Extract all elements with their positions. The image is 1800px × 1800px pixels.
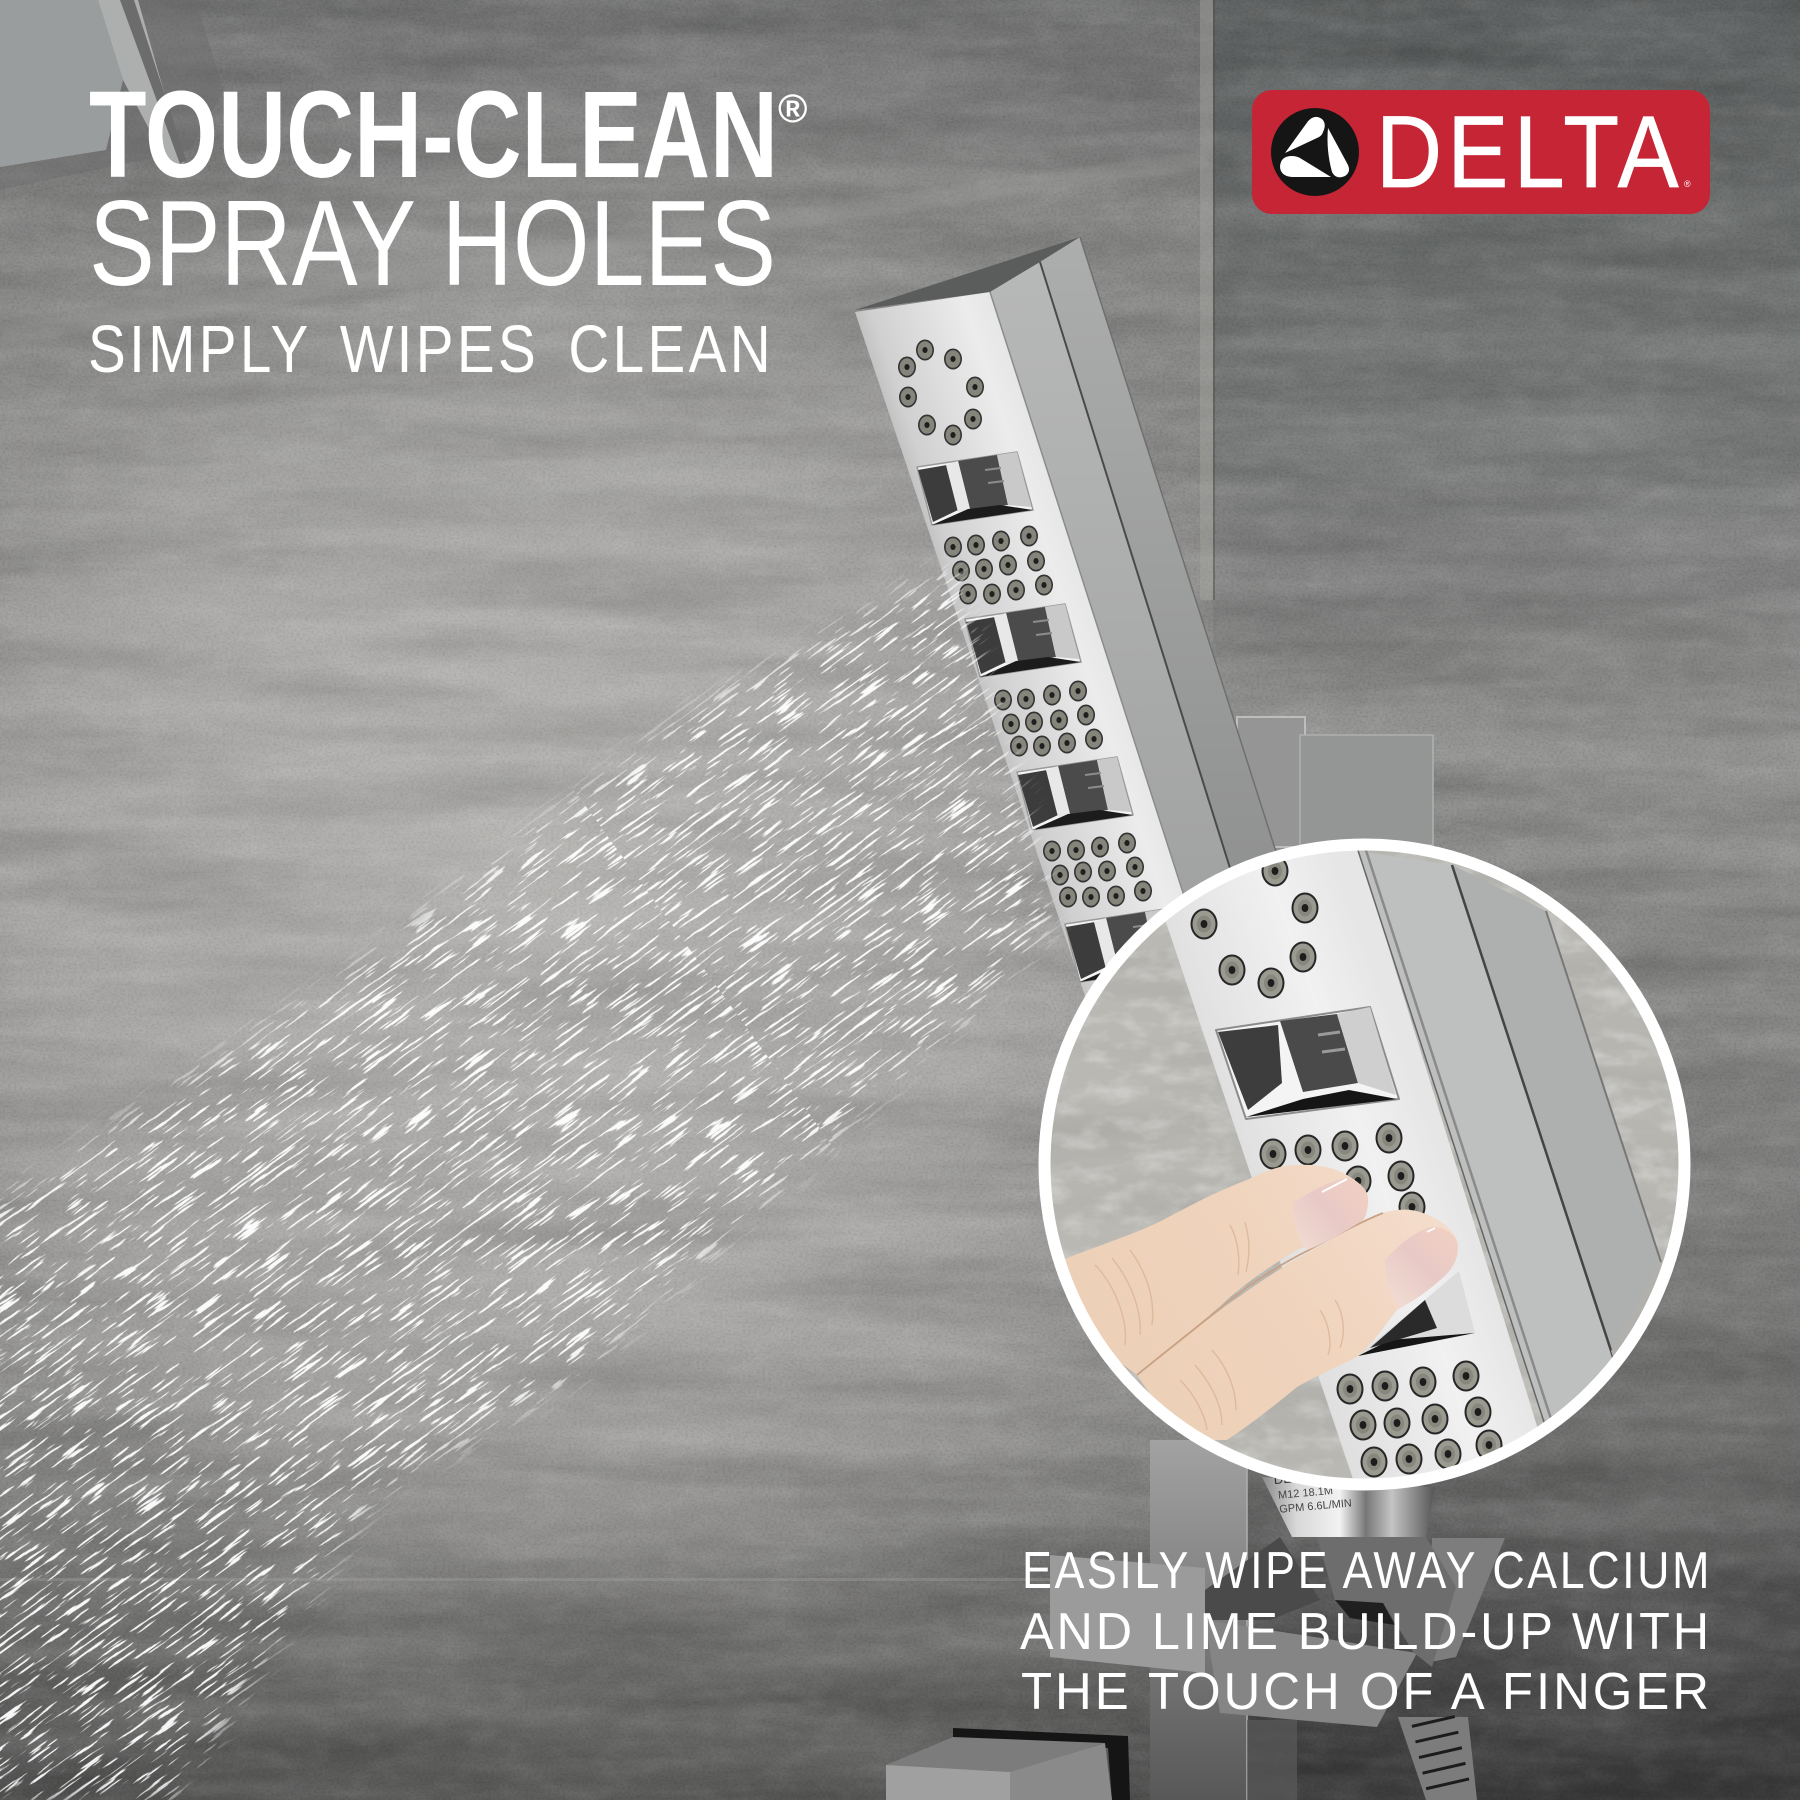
chrome stem bbox=[1317, 1537, 1456, 1667]
slide bar below lens bbox=[1150, 1440, 1297, 1800]
caption bbox=[1020, 1542, 1712, 1721]
lens side faces bbox=[1360, 852, 1662, 1419]
lens chrome recess bbox=[1216, 1007, 1399, 1119]
wall niche top left bbox=[0, 0, 224, 190]
chrome recess 3 bbox=[1017, 757, 1133, 830]
red badge bbox=[1252, 90, 1710, 214]
upper finger bbox=[1040, 1165, 1368, 1375]
ring of spray holes bbox=[898, 340, 984, 446]
spray holes grid 2 bbox=[994, 680, 1103, 756]
chrome neck bbox=[1262, 1477, 1435, 1537]
holder dark gap bbox=[1205, 1537, 1320, 1620]
chrome recess 1 bbox=[917, 452, 1033, 525]
front face bbox=[855, 292, 1195, 1100]
caption line 3: THE TOUCH OF A FINGER bbox=[1021, 1663, 1712, 1721]
logo wordmark: DELTA bbox=[1376, 95, 1684, 209]
hand shower head bbox=[855, 237, 1285, 1100]
logo registered mark: ® bbox=[1684, 179, 1691, 189]
magnified lens circle bbox=[1030, 830, 1710, 1500]
fingers bbox=[1040, 1165, 1458, 1440]
lens ring of spray holes bbox=[1190, 856, 1318, 998]
holder center block bbox=[1205, 1620, 1417, 1727]
lens white ring bbox=[1044, 844, 1684, 1484]
neck engraving: GPM 6.6L/MIN bbox=[1279, 1497, 1352, 1516]
registered mark: ® bbox=[778, 87, 807, 131]
hand shower neck and holder bbox=[1050, 1466, 1505, 1727]
caption line 1: EASILY WIPE AWAY CALCIUM bbox=[1022, 1542, 1712, 1600]
logo emblem bbox=[1271, 108, 1359, 196]
title bbox=[88, 67, 807, 387]
chrome recess 4 bbox=[1065, 909, 1181, 982]
outer side face bbox=[1040, 237, 1285, 900]
holder left wing bbox=[1050, 1555, 1205, 1673]
neck engraving: DELTA bbox=[1273, 1469, 1314, 1487]
chrome recess 2 bbox=[965, 604, 1081, 677]
lens wall background bbox=[1050, 850, 1678, 1478]
heading line 1: TOUCH-CLEAN bbox=[89, 67, 778, 204]
heading line 2: SPRAY HOLES bbox=[89, 175, 776, 311]
caption line 2: AND LIME BUILD-UP WITH bbox=[1020, 1603, 1712, 1661]
finger wrinkles bbox=[1095, 1222, 1343, 1430]
neck engraving: M12 18.1M bbox=[1278, 1485, 1333, 1502]
water spray bbox=[0, 554, 1065, 1800]
wall bracket behind shower head bbox=[1237, 717, 1433, 847]
hose bbox=[1398, 1717, 1477, 1800]
lower finger bbox=[1137, 1210, 1458, 1440]
upper fingernail bbox=[1293, 1178, 1368, 1250]
lens second recess bbox=[1358, 1271, 1475, 1356]
spray holes grid 1 bbox=[944, 526, 1053, 604]
lower fingernail bbox=[1385, 1227, 1458, 1308]
lens spray holes upper grid bbox=[1260, 1122, 1426, 1222]
Delta logo bbox=[1252, 90, 1710, 214]
bottom left valve block bbox=[886, 1728, 1130, 1800]
top face bbox=[855, 237, 1080, 310]
lens front face bbox=[1166, 850, 1538, 1478]
spray holes grid 3 bbox=[1043, 832, 1152, 908]
holder right wing bbox=[1426, 1538, 1505, 1663]
neck engraving bbox=[1273, 1466, 1352, 1516]
tagline: SIMPLY WIPES CLEAN bbox=[88, 312, 774, 387]
lens spray holes lower grid bbox=[1336, 1360, 1502, 1478]
middle side face bbox=[990, 262, 1240, 930]
